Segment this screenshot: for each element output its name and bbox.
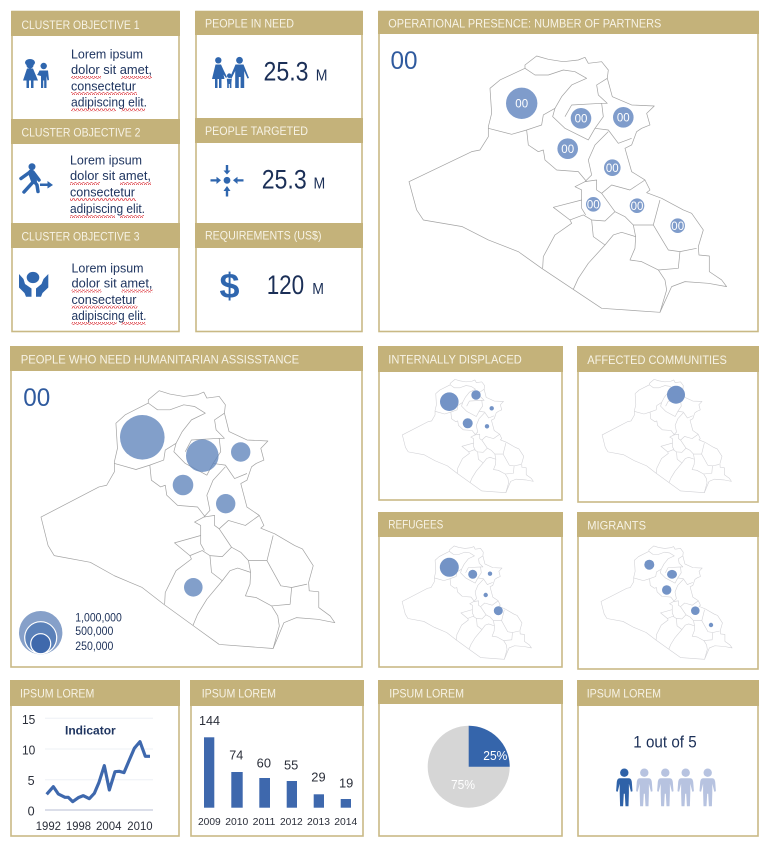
bubbles: partners by governorate: 00 [606,163,619,175]
line chart: indicator: 15 [22,713,35,727]
bar chart: 2014 [334,817,358,828]
text: 1 out of 5: 1 out of 5 [633,733,697,752]
header: refugees: REFUGEES [388,518,443,532]
header: requirements [195,223,363,248]
bubbles: partners by governorate: 00 [631,201,643,213]
bar chart: 19 [339,777,353,791]
bar chart: 2012 [280,817,303,828]
map: internally displaced [402,379,533,493]
icon: person walking with arrow [21,163,53,192]
header: humanitarian assistance [10,346,363,371]
line chart: indicator [22,713,153,833]
header: operational presence: OPERATIONAL PRESENCE: NUMBER OF PARTNERS [388,17,661,31]
panel: cluster objectives [11,11,180,332]
bubbles: migrants [644,560,713,627]
text: objective 2 body: dolor sit amet, [70,168,151,183]
text: objective 3 body: consectetur [72,292,137,307]
line chart: indicator: 1992 [36,821,61,833]
panel: migrants [577,512,759,669]
header: 1 out of 5: IPSUM LOREM [587,686,661,700]
text: objective 3 body: Lorem ipsum [72,260,144,276]
header: people targeted [195,118,363,143]
bar chart [198,714,358,828]
header: requirements: REQUIREMENTS (US$) [205,228,322,242]
bar chart: 2009 [198,817,221,828]
pie chart: 25% [483,748,508,763]
text: objective 1 body [71,46,152,112]
header: internally displaced [378,346,563,372]
header: pie chart [378,680,563,704]
bubbles: partners by governorate: 00 [671,221,684,233]
header: affected communities: AFFECTED COMMUNITIES [587,353,727,367]
map: partners [409,56,727,312]
bar chart: 29 [311,771,326,785]
bubbles: partners by governorate: 00 [617,112,630,124]
header: cluster objective 3: CLUSTER OBJECTIVE 3 [22,230,140,244]
map: refugees [402,546,531,659]
text: objective 2 body: Lorem ipsum [70,152,142,168]
line chart: indicator: 2010 [127,821,153,833]
line chart: indicator: 2004 [96,821,122,833]
header: migrants: MIGRANTS [587,518,646,532]
panel: operational presence [378,11,759,332]
text: objective 1 body: Lorem ipsum [71,46,143,62]
text: objective 2 body [70,152,151,218]
bubbles: partners by governorate: 00 [587,200,600,212]
legend: bubble sizes: 500,000 [75,626,113,638]
bubbles: partners by governorate: 00 [575,114,587,126]
bubble: affected communities [667,386,685,404]
header: line chart [10,680,180,706]
icon: arrows converging on a point [210,165,244,196]
header: operational presence [378,11,759,34]
bar chart: 74 [229,748,243,762]
header: people in need [195,11,363,35]
header: bar chart: IPSUM LOREM [202,686,276,700]
bubbles: partners by governorate: 00 [561,144,574,156]
bar chart: 2011 [253,817,276,828]
legend: bubble sizes [19,611,122,654]
figure: people targeted: 25.3 [262,164,307,194]
header: cluster objective 3 [11,223,180,248]
text: objective 3 body [72,260,152,325]
line chart: indicator: 0 [28,804,35,818]
icon: hands protecting a person [19,272,48,297]
header: line chart: IPSUM LOREM [20,686,94,700]
total value: 00 [23,384,50,412]
text: objective 2 body: adipiscing elit. [70,201,145,216]
header: humanitarian assistance: PEOPLE WHO NEED HUMANITARIAN ASSISSTANCE [21,352,299,366]
map: affected communities [602,379,731,493]
map: migrants [601,546,732,659]
pie chart [428,726,510,808]
bar chart: 2013 [307,817,330,828]
map: people in need [41,391,335,648]
line chart: indicator: 5 [28,774,35,788]
figure: people in need: M [316,68,327,85]
header: pie chart: IPSUM LOREM [389,686,464,700]
panel: internally displaced [378,346,563,500]
figure: people targeted: M [314,175,325,192]
header: cluster objective 1 [11,11,180,36]
bar chart: 2010 [225,817,249,828]
text: objective 2 body: consectetur [70,184,136,200]
text: objective 3 body: adipiscing elit. [72,308,146,323]
panel: bar chart [190,680,364,836]
text: objective 1 body: consectetur [71,78,137,94]
bubbles: partners by governorate: 00 [515,98,528,110]
header: cluster objective 2: CLUSTER OBJECTIVE 2 [22,126,141,140]
header: people in need: PEOPLE IN NEED [205,17,294,31]
icon: woman and child [23,59,49,88]
bubbles: refugees [440,558,503,615]
figure: requirements: 120 [267,270,304,300]
bubbles: internally displaced [440,390,494,428]
line chart: indicator: 10 [22,744,35,758]
icon: dollar sign: $ [220,267,240,306]
pie chart: 75% [451,777,475,792]
header: bar chart [190,680,364,706]
text: objective 1 body: dolor sit amet, [71,62,152,77]
panel: people who need humanitarian assistance [10,346,363,667]
header: internally displaced: INTERNALLY DISPLACED [388,352,522,366]
figure: requirements: M [312,281,324,298]
figure: people in need: 25.3 [264,57,308,87]
header: cluster objective 1: CLUSTER OBJECTIVE 1 [22,18,140,32]
bubbles: people in need [120,415,250,597]
bar chart: 144 [199,714,220,728]
panel: key figures [195,11,363,332]
line chart: indicator: Indicator [65,723,116,737]
bar chart: 60 [257,756,271,770]
header: affected communities [577,346,759,372]
panel: pie chart [378,680,563,836]
panel: line chart [10,680,180,836]
header: people targeted: PEOPLE TARGETED [205,124,308,138]
text: objective 3 body: dolor sit amet, [72,276,152,290]
panel: refugees [378,512,563,667]
legend: bubble sizes: 250,000 [75,641,113,653]
panel: 1 out of 5 [577,680,759,836]
panel: affected communities [577,346,759,502]
bar chart: 55 [284,758,298,772]
text: objective 1 body: adipiscing elit. [71,94,147,110]
header: migrants [577,512,759,537]
bubbles: partners by governorate [506,88,685,233]
icon row: five people, one highlighted [616,768,716,806]
legend: bubble sizes: 1,000,000 [75,613,122,625]
header: cluster objective 2 [11,119,180,144]
header: 1 out of 5 [577,680,759,706]
total value: 00 [390,47,418,75]
header: refugees [378,512,563,537]
line chart: indicator: 1998 [66,821,91,833]
icon: family [212,57,249,88]
